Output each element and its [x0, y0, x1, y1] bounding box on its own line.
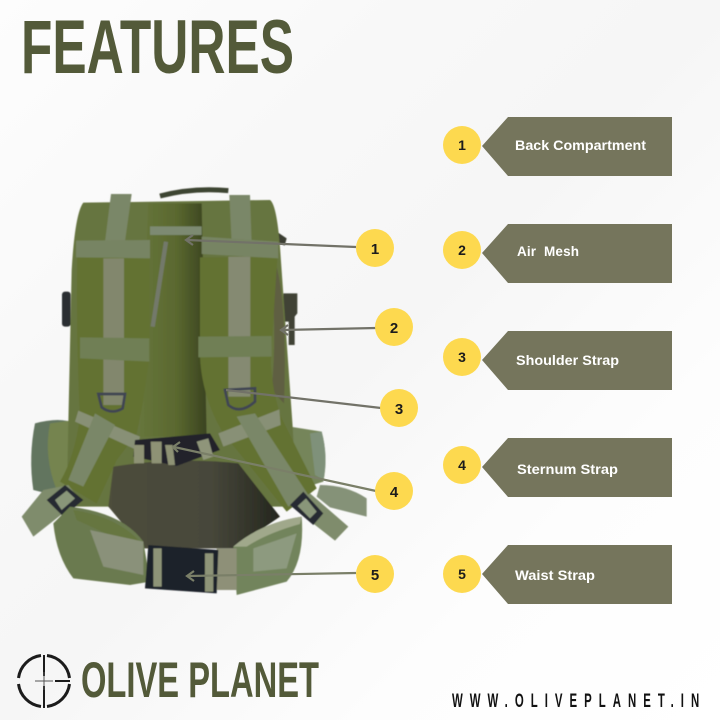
waist strap [217, 548, 237, 590]
feature 3: shoulder strap: 3 [458, 349, 466, 365]
website: WWW.OLIVEPLANET.IN [452, 691, 699, 712]
right long strap [228, 257, 250, 397]
title: FEATURES [21, 5, 294, 90]
marker 3 [380, 389, 418, 427]
marker 1: 1 [371, 241, 379, 258]
marker 5: 5 [371, 567, 379, 584]
waist belt right [233, 517, 302, 595]
feature 1: back compartment: 1 [458, 137, 466, 153]
lower shoulder webbing left [68, 413, 115, 487]
lower shoulder webbing right [237, 413, 308, 507]
feature 5: waist strap [443, 545, 672, 604]
lower mesh [108, 461, 280, 548]
side buckle left [62, 292, 71, 327]
marker 5 [356, 555, 394, 593]
waist buckle [145, 545, 218, 593]
arrow 4 [173, 442, 376, 491]
arrow 2 [281, 325, 376, 335]
left long strap [103, 258, 124, 405]
marker 3: 3 [395, 401, 403, 418]
adjuster straps right [292, 493, 348, 541]
feature 2: air mesh [443, 224, 672, 283]
feature 4: sternum strap: 4 [458, 457, 466, 473]
arrow 1 [186, 235, 356, 247]
pack body [67, 200, 297, 507]
middle webbing [80, 337, 149, 362]
D rings [98, 394, 125, 411]
feature 5: waist strap: 5 [458, 566, 466, 582]
arrow 3 [226, 390, 381, 408]
sternum strap [75, 411, 140, 450]
sternum buckle [133, 433, 220, 466]
feature 4: sternum strap: Sternum Strap [517, 462, 618, 477]
hardware top right [277, 232, 287, 246]
right shoulder pad [200, 257, 317, 512]
top handle [160, 190, 228, 196]
side strap right [317, 485, 367, 517]
mesh edge cord [153, 242, 166, 327]
adjuster straps left [22, 485, 80, 537]
feature 1: back compartment [443, 117, 672, 176]
marker 2 [375, 308, 413, 346]
marker 2: 2 [390, 320, 398, 337]
logo icon: crosshair [18, 655, 70, 708]
feature 5: waist strap: Waist Strap [515, 568, 595, 583]
left hip pouch [31, 420, 80, 495]
feature 4: sternum strap [443, 438, 672, 497]
light webbing left [90, 530, 143, 575]
brand name: OLIVE PLANET [81, 652, 319, 708]
feature 3: shoulder strap: Shoulder Strap [516, 353, 619, 368]
upper cross webbing [76, 240, 150, 258]
right hip pouch [290, 427, 325, 490]
waist belt left [53, 507, 150, 585]
feature 2: air mesh: 2 [458, 242, 466, 258]
backpack illustration [22, 190, 367, 595]
feature 1: back compartment: Back Compartment [515, 138, 647, 153]
air mesh side [268, 262, 285, 403]
side buckle right [283, 293, 297, 345]
back panel [140, 203, 207, 437]
marker 4: 4 [390, 484, 399, 501]
marker 4 [375, 472, 413, 510]
arrow 5 [187, 571, 356, 581]
light webbing right [253, 533, 297, 572]
marker 1 [356, 229, 394, 267]
left shoulder pad [60, 257, 149, 503]
feature 3: shoulder strap [443, 331, 672, 390]
top edge straps [105, 194, 132, 242]
feature 2: air mesh: Air Mesh [517, 244, 579, 259]
